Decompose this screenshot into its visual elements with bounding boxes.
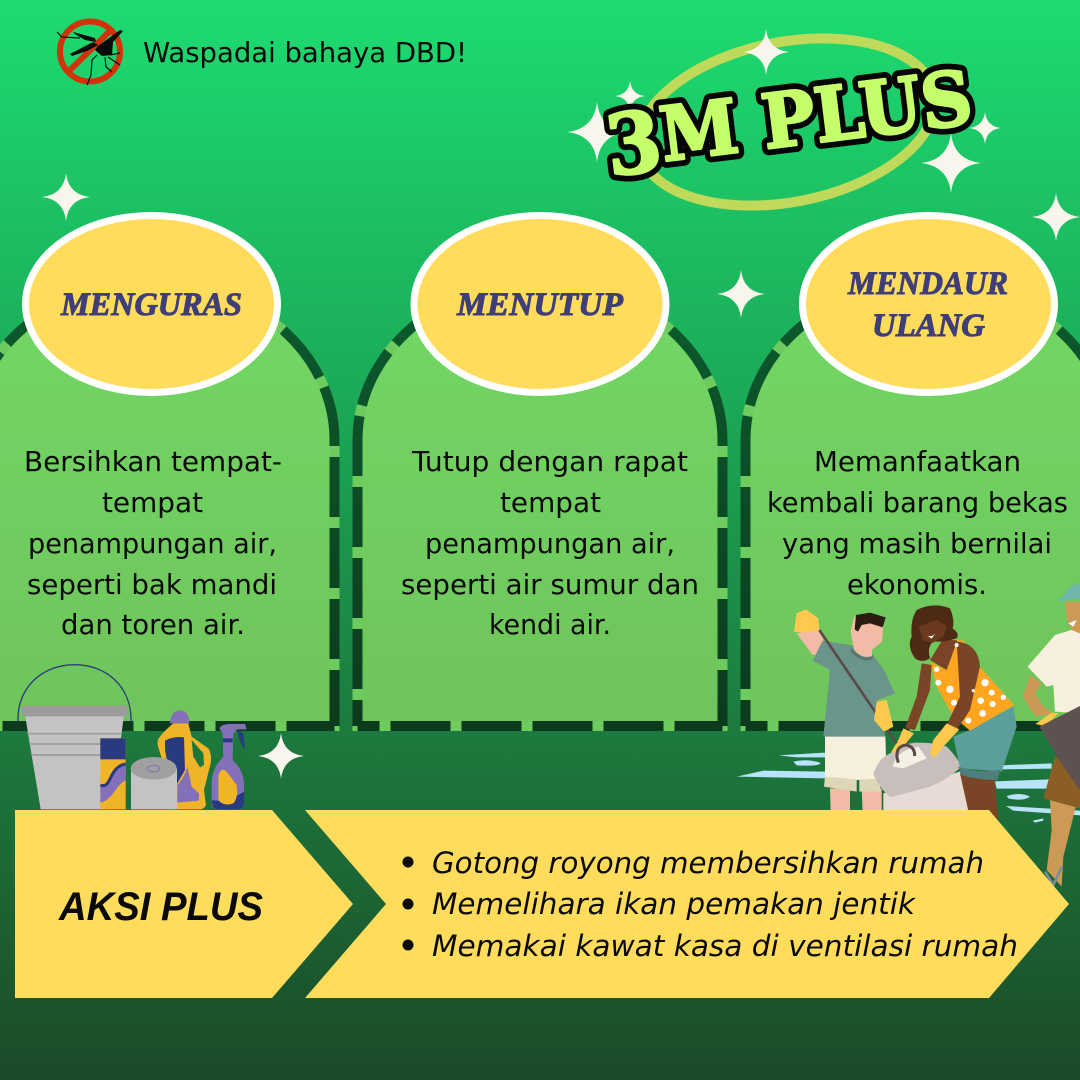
third person <box>1023 583 1080 887</box>
grabber stick <box>819 630 915 763</box>
text block: mendaur ulang: yang masih bernilai <box>782 527 1052 560</box>
text block: menguras: tempat <box>102 486 203 519</box>
oval: mendaur ulang: ULANG <box>872 308 985 344</box>
sparkles <box>42 29 1080 779</box>
man's lower glove <box>874 700 893 732</box>
text block: mendaur ulang: Memanfaatkan <box>814 445 1021 478</box>
arrow: aksi plus list <box>305 810 1069 998</box>
text block: menutup: seperti air sumur dan <box>401 568 699 601</box>
title: 3M PLUS: M PLUS <box>655 55 977 180</box>
text block: mendaur ulang: kembali barang bekas <box>767 486 1068 519</box>
header text: Waspadai bahaya DBD! <box>143 36 467 69</box>
oval: menutup: MENUTUP <box>456 287 624 323</box>
text block: menutup: kendi air. <box>489 608 611 641</box>
title ring <box>624 15 950 229</box>
text block: menguras: Bersihkan tempat- <box>24 445 282 478</box>
oval: mendaur ulang: MENDAUR <box>847 266 1008 302</box>
title: 3M PLUS: 3 <box>600 92 667 196</box>
arrow: aksi plus label: AKSI PLUS <box>58 885 263 929</box>
text block: menguras: seperti bak mandi <box>27 568 277 601</box>
text block: menguras <box>24 445 282 641</box>
illustration: bucket and cleaning supplies <box>18 665 247 809</box>
title: 3M PLUS: M PLUS <box>655 55 977 180</box>
text block: menguras: penampungan air, <box>28 527 277 560</box>
oval: menutup <box>414 216 666 392</box>
arrow: aksi plus list: Gotong royong membersihkan rumah <box>432 846 984 880</box>
arrow: aksi plus list: Memelihara ikan pemakan jentik <box>432 887 916 921</box>
title: 3M PLUS: 3 <box>600 92 667 196</box>
text block: menutup: penampungan air, <box>425 527 675 560</box>
man <box>794 609 895 813</box>
text block: mendaur ulang <box>767 445 1068 601</box>
text block: menutup: tempat <box>500 486 601 519</box>
panel: menguras arch <box>0 282 334 726</box>
woman <box>891 605 1017 818</box>
icon: no mosquito <box>57 22 123 85</box>
arrow: aksi plus list: Memakai kawat kasa di ventilasi rumah <box>432 929 1018 963</box>
panel: mendaur ulang arch <box>746 282 1080 726</box>
text block: menutup <box>401 445 699 641</box>
text block: mendaur ulang: ekonomis. <box>847 568 987 601</box>
oval: menguras: MENGURAS <box>60 287 242 323</box>
bag <box>873 743 975 817</box>
water puddles <box>737 753 1080 823</box>
text block: menguras: dan toren air. <box>61 608 245 641</box>
illustration: people cleaning up <box>737 583 1080 887</box>
text block: menutup: Tutup dengan rapat <box>411 445 688 478</box>
oval: menguras <box>26 216 278 392</box>
panel: menutup arch <box>358 282 722 726</box>
arrow: aksi plus label <box>15 810 353 998</box>
oval: mendaur ulang <box>802 216 1054 392</box>
